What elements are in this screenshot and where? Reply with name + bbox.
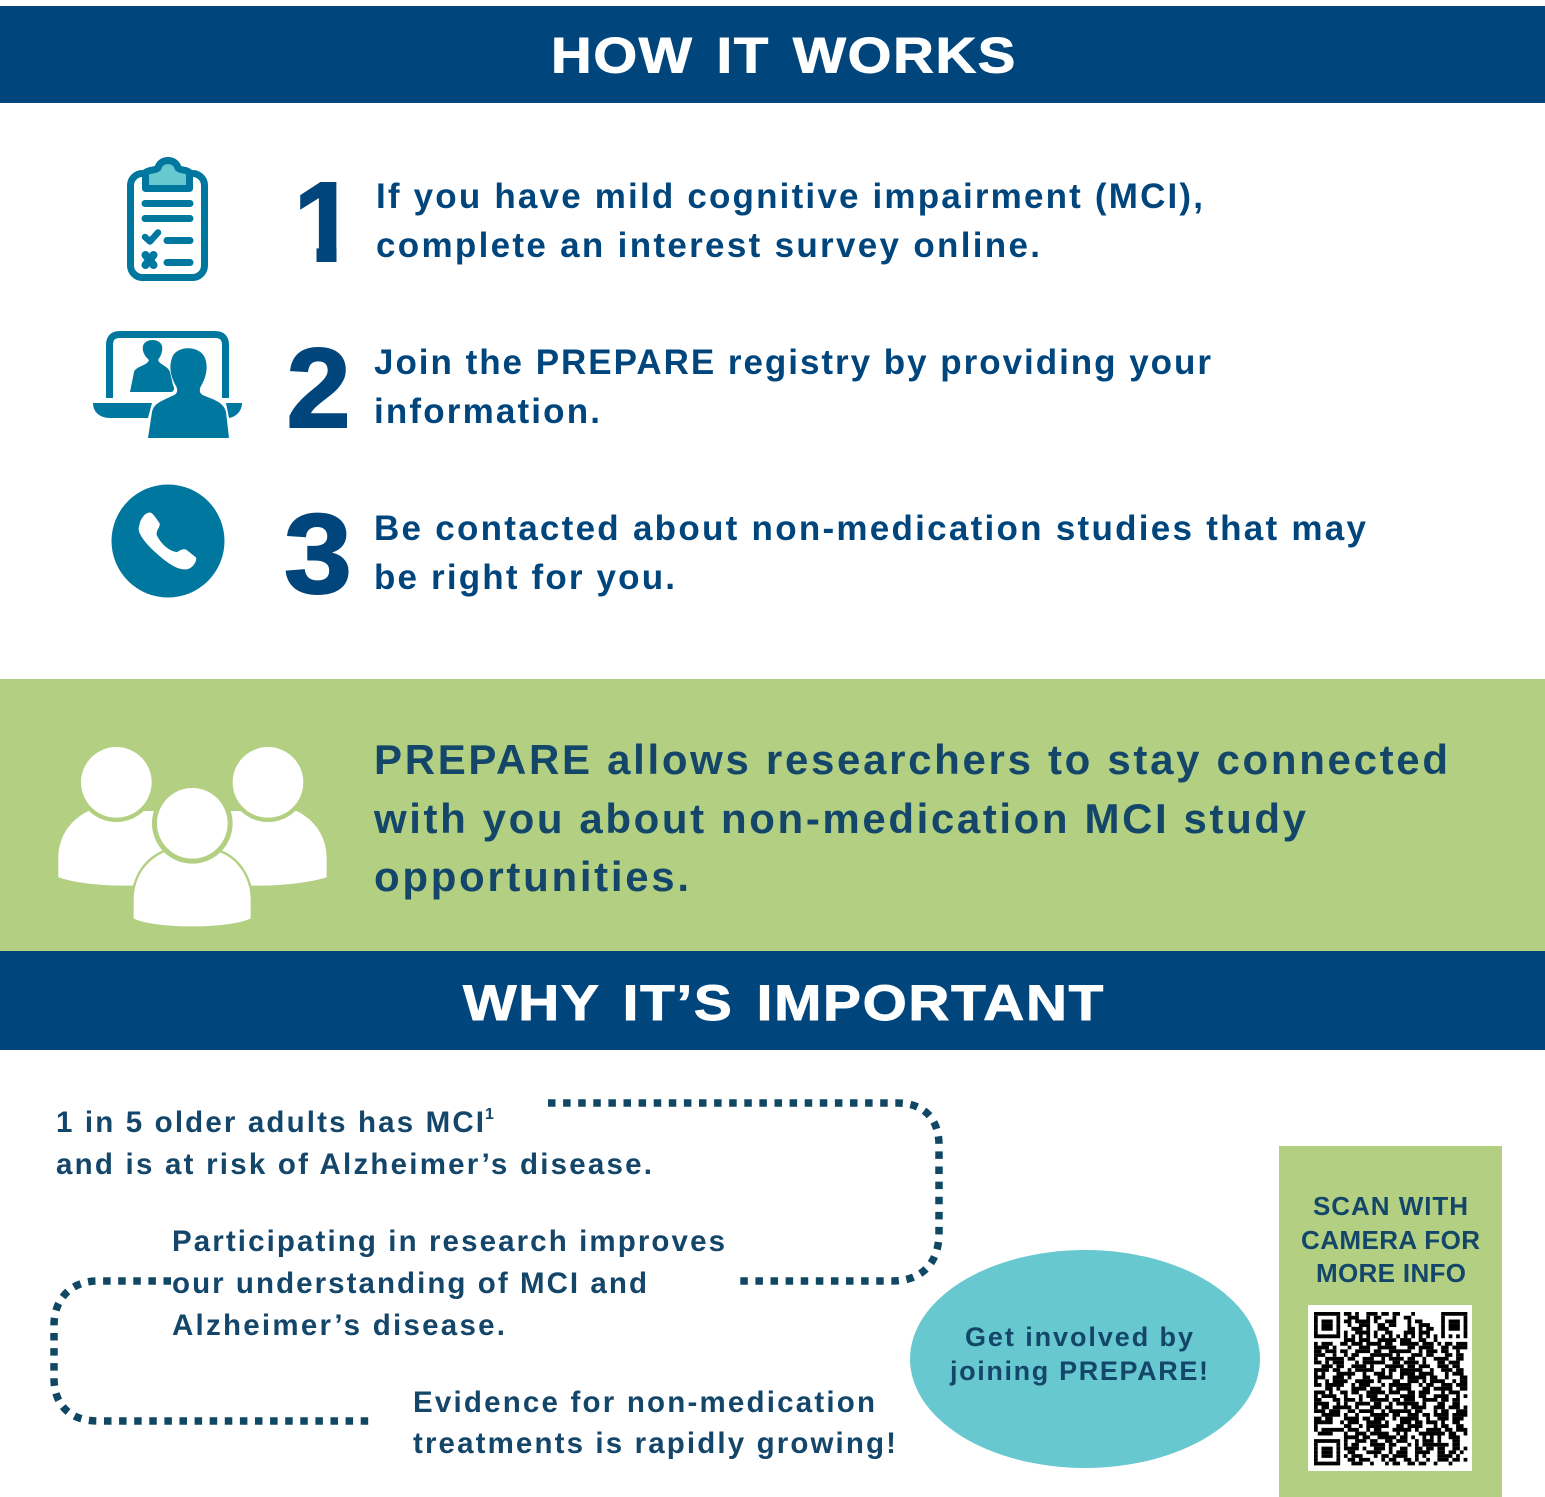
dotted connector: upper bbox=[548, 1103, 939, 1281]
panel: scan qr bbox=[1279, 1146, 1502, 1497]
scan instructions: CAMERA FOR bbox=[1301, 1225, 1480, 1255]
icon: phone bbox=[112, 484, 224, 598]
step 1 text bbox=[376, 177, 1203, 265]
icon: video call laptop bbox=[93, 334, 242, 438]
step 1 text: complete an interest survey online. bbox=[376, 226, 1040, 265]
fact: 1 in 5: 1 bbox=[485, 1106, 494, 1123]
prepare statement text: PREPARE allows researchers to stay connected bbox=[374, 736, 1448, 783]
panel: why it's important header bbox=[0, 951, 1545, 1050]
prepare statement text: with you about non-medication MCI study bbox=[373, 795, 1307, 842]
step 3 text bbox=[374, 509, 1367, 597]
number 3: 3 bbox=[284, 491, 352, 617]
fact: evidence: Evidence for non-medication bbox=[413, 1386, 875, 1419]
callout: get involved: Get involved by bbox=[965, 1322, 1193, 1352]
fact: participating in research bbox=[172, 1225, 725, 1342]
scan instructions: SCAN WITH bbox=[1313, 1191, 1468, 1221]
step 1 text: If you have mild cognitive impairment (MCI), bbox=[376, 177, 1203, 216]
qr code bbox=[1314, 1314, 1467, 1463]
scan instructions bbox=[1301, 1191, 1480, 1288]
panel: prepare green band bbox=[0, 679, 1545, 951]
heading: why it's important: WHY IT’S IMPORTANT bbox=[463, 975, 1105, 1031]
callout: get involved bbox=[910, 1250, 1260, 1468]
heading: how it works: HOW IT WORKS bbox=[551, 28, 1017, 84]
fact: 1 in 5 bbox=[56, 1106, 652, 1181]
icon: group of people bbox=[58, 743, 327, 926]
callout: get involved: joining PREPARE! bbox=[949, 1356, 1208, 1386]
fact: participating in research: our understanding of MCI and bbox=[172, 1267, 647, 1300]
panel: how it works header bbox=[0, 6, 1545, 103]
prepare statement text bbox=[373, 736, 1448, 900]
fact: 1 in 5: and is at risk of Alzheimer’s disease. bbox=[56, 1148, 652, 1181]
step 2 text bbox=[374, 343, 1211, 431]
step 2 text: Join the PREPARE registry by providing your bbox=[374, 343, 1211, 382]
fact: evidence bbox=[413, 1386, 896, 1460]
number 1: 1 bbox=[294, 159, 356, 285]
number 2: 2 bbox=[286, 326, 351, 452]
prepare statement text: opportunities. bbox=[374, 853, 689, 900]
scan instructions: MORE INFO bbox=[1316, 1258, 1466, 1288]
step 2 text: information. bbox=[374, 392, 600, 431]
fact: evidence: treatments is rapidly growing! bbox=[413, 1427, 896, 1460]
dotted connector: lower bbox=[54, 1281, 369, 1421]
fact: 1 in 5: 1 in 5 older adults has MCI bbox=[56, 1106, 484, 1139]
fact: participating in research: Alzheimer’s disease. bbox=[172, 1309, 505, 1342]
step 3 text: be right for you. bbox=[374, 558, 675, 597]
step 3 text: Be contacted about non-medication studies that may bbox=[374, 509, 1367, 548]
icon: clipboard bbox=[130, 160, 204, 278]
fact: participating in research: Participating in research improves bbox=[172, 1225, 725, 1258]
